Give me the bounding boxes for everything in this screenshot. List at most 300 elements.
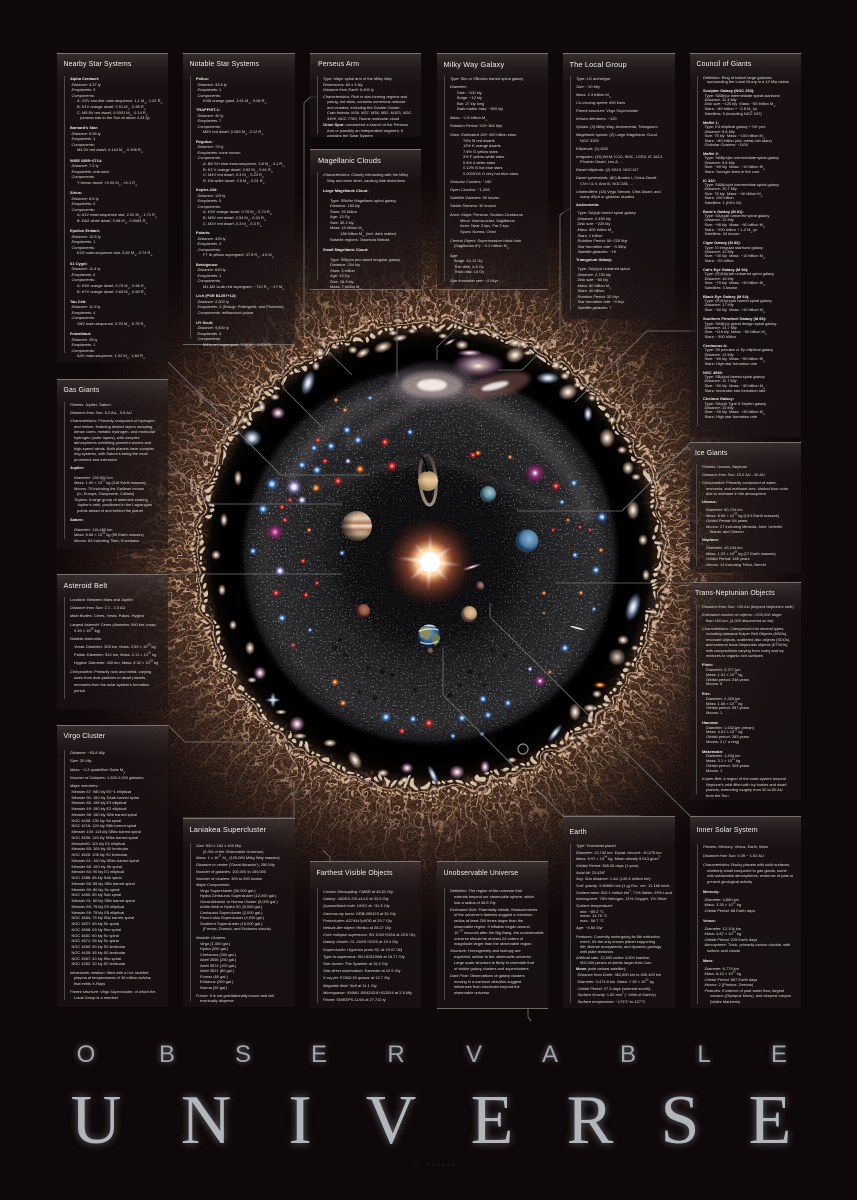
text block: Kepler-444: — [196, 187, 217, 192]
text block: Galaxy: JADES-GS-z14-0 at 33.9 Gly — [323, 896, 388, 901]
text block: Distance: 433 ly — [198, 236, 226, 241]
text block: C: M4V red dwarf, 0.3 M ☉, 0.24 R ☉ — [203, 172, 264, 179]
text block: Exoplanets: 3 — [198, 241, 221, 246]
text block: Parent structure: Virgo Supercluster — [576, 108, 639, 113]
text block: Age: — [450, 253, 458, 258]
text block: Type Ia supernova: SN UDS10Wil at 16.77 Gly — [323, 954, 405, 959]
arrow: Unobservable Universe — [528, 1009, 531, 1021]
text block: Bulge: 10-12 Gy — [454, 258, 482, 263]
text block: Axial tilt: 23.439° — [576, 870, 605, 875]
text block: Number of clusters: 300 to 500 known — [196, 876, 262, 881]
panel: Trans-Neptunian Objects — [690, 582, 801, 800]
text block: Orbital Period: 225 Earth days — [704, 937, 757, 942]
text block: Diameter: 116,460 km — [74, 527, 112, 532]
panel: Gas Giants: Moons: 83 including Titan, Enceladus — [74, 538, 139, 543]
text block: Supercluster: Hyperion proto-SC at 19.07 Gly — [323, 947, 402, 952]
text block: Stars: ~20 billion — [704, 258, 734, 263]
text block: Surface temperature: −173°C to 127°C — [578, 999, 645, 1004]
text block: Stars: 3 billion — [330, 268, 355, 273]
text block: Cigar Galaxy (M 82): — [703, 240, 741, 245]
text block: Sirius: — [70, 190, 82, 195]
text block: Gamma-ray burst: GRB-090423 at 30 Gly — [323, 911, 396, 916]
text block: period — [74, 688, 85, 693]
text block: Type: SAB(s)c intermediate spiral-starburst — [704, 93, 780, 98]
text block: Disk size: ~220 kly — [578, 221, 610, 226]
text block: Satellites: 5 (including NGC 247) — [704, 111, 762, 116]
text block: Diameter: 50,724 km — [706, 507, 743, 512]
heading: Ice Giants — [695, 450, 728, 457]
text block: 10−37 seconds after the Big Bang, the unobservable — [454, 929, 544, 935]
text block: Distance from Sun: 2.1 - 3.3 AU — [70, 605, 125, 610]
heading: Council of Giants — [696, 61, 752, 68]
text block: Distance: 16 Mly — [704, 276, 734, 281]
text block: Size: ~60 kly Mass: ~40 billion M ☉ — [704, 307, 765, 314]
text block: Diameter: 4,880 km — [704, 897, 739, 902]
text block: Exoplanets: 1 — [72, 342, 95, 347]
text block: A: G2V sun-like main sequence, 1.1 M ☉, 1.22 R ☉ — [77, 98, 163, 105]
text block: Moons: 5 — [706, 681, 722, 686]
text block: Mass: 1.66 × 1022 kg — [706, 700, 742, 706]
text block: than 100 km, (4,000 discovered so far) — [706, 618, 773, 622]
title line: Universe: UNIVERSE — [71, 1082, 791, 1159]
text block: Inner: Near 3 kpc, Far 3 kpc — [460, 223, 509, 228]
text block: K0III orange giant, 1.91 M ☉, 9.06 R ☉ — [203, 98, 267, 105]
text block: Distance: 119 ly — [198, 193, 225, 198]
text block: Components: — [72, 92, 95, 98]
text block: Exoplanets: 0 — [72, 201, 95, 206]
text block — [64, 750, 156, 1000]
text block: Age: 13 Gy — [330, 214, 350, 219]
star speckle field — [241, 368, 619, 744]
text block: Type: SAB(rs)cd intermediate spiral galaxy — [704, 182, 779, 187]
text block: Distance: 2,300 ly — [198, 299, 229, 304]
text block — [444, 888, 544, 1000]
panel: Earth — [563, 816, 675, 1008]
text block: Small Magellanic Cloud: — [323, 247, 368, 252]
text block: 12% K orange dwarfs — [463, 143, 501, 148]
text block: Distance: 9,500 ly — [198, 325, 229, 330]
arrow: Notable Star Systems — [240, 344, 323, 428]
text block: max: 56.7 °C — [580, 918, 604, 923]
text block: Components: — [72, 142, 95, 147]
text block: Centaurus (300 gal.) — [200, 952, 236, 957]
panel: Asteroid Belt — [57, 574, 168, 709]
spiral galaxy: Andromeda — [465, 367, 533, 403]
text block: Moons: 2 (+ a ring) — [706, 739, 739, 744]
text block: Distance: 11.4 Mly — [704, 97, 737, 102]
text block: NGC 4571: 55 kly Sc spiral — [72, 938, 119, 943]
text block: Type: LG archetype — [576, 76, 610, 81]
text block: Distance: 643 ly — [198, 267, 226, 272]
text block: C: M2V red dwarf, 0.3 M ☉, 0.3 R ☉ — [203, 221, 262, 228]
text block — [570, 843, 672, 1003]
text block: Core collapse supernova: SN 1000+0216 at 23.6 Gly — [323, 932, 415, 937]
text block: Distance: 11.7 Mly — [704, 378, 737, 383]
text block: Eridanus (200 gal.) — [200, 979, 233, 984]
text block: Distance: 2,450 kly — [578, 216, 611, 221]
text block: Magellanic spirals: (2) Large Magellanic Cloud, — [576, 132, 658, 137]
text block: Messier 100: 115 kly SBbc barred spiral — [72, 829, 141, 834]
text block: Diameter: 2,377 km — [706, 667, 740, 672]
text block: has a radius of 46.5 Gly — [454, 900, 496, 905]
text block: event, it's the only known planet supporting — [580, 939, 655, 944]
text block: Virgo (1,300 gal.) — [200, 941, 230, 946]
text block: Messier 84: 90 kly E1 elliptical — [72, 869, 124, 874]
text block: Stars: Estimated 100−400 billion stars — [450, 132, 516, 137]
text block — [697, 844, 793, 1004]
arrow: Farthest Visible Objects — [323, 850, 330, 861]
text block: C: M5.5V red dwarf, 0.0001 M ☉, 0.14 R ☉ — [77, 110, 148, 116]
title — [71, 1041, 791, 1167]
text block: Stars: moderate star formation rate — [704, 388, 766, 392]
arrow: Inner Solar System — [490, 603, 690, 816]
text block: Planets: Mercury, Venus, Earth, Mars — [703, 844, 768, 849]
text block: including classical Kuiper Belt Objects (KBOs), — [706, 631, 787, 636]
text block: life, diverse ecosystems, and dynamic geology — [580, 944, 661, 949]
panel: Magellanic Clouds: Mass: 7 billion M ☉ — [330, 284, 362, 291]
text block: Largest Asteroid: Ceres (diameter: 940 km, mass: — [70, 622, 157, 627]
stars and nebulae — [248, 395, 608, 740]
text block: NGC 4438: 130 kly Sa spiral — [72, 818, 121, 823]
text block: Estimated number of objects: >200,000 larger — [702, 612, 782, 617]
text block: Features: Currently undergoing its 6th extinction — [576, 934, 660, 939]
text block: UY Scuti: — [196, 320, 213, 325]
text block: NGC 4388: 85 kly SAb spiral — [72, 875, 122, 880]
text block: Sculptor Galaxy (NGC 253): — [703, 88, 754, 93]
text block: Type: I0 irregular starburst galaxy — [704, 245, 763, 250]
text block: Disk size: ~120 kly Mass: ~50 billion M ☉ — [704, 101, 776, 108]
heading: Notable Star Systems — [190, 61, 259, 68]
text block: Orbital period: 248 years — [706, 677, 749, 682]
text block: Components: — [72, 245, 95, 250]
text block: Size: ~70 kly Mass: ~30 billion M ☉ — [704, 280, 765, 287]
text block: Mass: 800 billion M ☉ — [578, 227, 614, 234]
text block: Jupiter's orbit, positioned in the Lagrangian — [77, 502, 152, 507]
text block: Thin disk: 4-8 Gy — [454, 264, 484, 269]
text block: A: A1V main-sequence star, 2.02 M ☉, 1.71 R ☉ — [77, 212, 157, 219]
text block: Venus: — [703, 918, 716, 923]
text block: (Fornax, Dorado, and Eridanus clouds) — [203, 926, 271, 931]
text block: Mass: ~1.2 quadrillion Solar M ☉ — [70, 766, 126, 773]
arrow: Nearby Star Systems — [168, 362, 370, 475]
text block: B: K7V orange dwarf, 0.63 M ☉, 0.60 R ☉ — [77, 288, 146, 295]
text block: Moons: 79 including the Galilean moons — [74, 486, 144, 491]
text block: Distance: 12 Mly — [704, 352, 734, 357]
text block: Diameter: 12,104 km — [704, 926, 741, 931]
text block: Surface area: 510.1 million km2, 71% Water, 29% Land — [576, 889, 672, 895]
text block: Distance: ~53.8 Mly — [70, 750, 105, 755]
text block: Hygiea: Diameter: 430 km, Mass: 8.32 × 1019 kg — [74, 659, 158, 665]
text block: 3499, NGC 7789, Taurus molecular cloud — [327, 116, 399, 121]
text block: Definition: Ring of twelve large galaxies — [703, 75, 772, 80]
text block: prominent and extensive — [74, 456, 117, 462]
text block: Regulus: — [196, 139, 213, 144]
text block: Messier 91: 80 kly SBb barred spiral — [72, 898, 135, 903]
text block: (Valles Marineris) — [710, 999, 740, 1004]
text block: Arm or possibly an independent segment, it — [327, 128, 403, 133]
text block: Distance from Sun: 0.39 − 1.52 AU — [703, 853, 764, 858]
text block: Messier 88: 100 kly Sb spiral — [72, 864, 122, 869]
text block: relatively small compared to gas giants, some — [707, 868, 787, 873]
text block: Type: S0 peculiar or Ep elliptical galaxy — [704, 347, 773, 352]
panel: Magellanic Clouds — [310, 149, 421, 290]
text block: Barnard's Star: — [70, 125, 98, 130]
text block — [190, 76, 285, 338]
text block: Diameter: 1,632 km (mean) — [706, 725, 754, 730]
text block: Hydra (200 gal.) — [200, 946, 228, 951]
planet: Venus — [461, 606, 477, 622]
arrow: Virgo Cluster — [168, 725, 290, 742]
text block — [570, 76, 663, 310]
text block: Exoplanets: 1 — [72, 239, 95, 244]
text block: Moons: 27 including Miranda, Ariel, Umbriel, — [706, 524, 783, 528]
heading: Nearby Star Systems — [64, 61, 131, 68]
text block: Crab Nebula, M36, M37, M38, M52, M103, NGC — [327, 110, 411, 115]
panel: Unobservable Universe — [437, 861, 548, 1009]
cosmic web texture — [75, 201, 784, 909]
heading: Asteroid Belt — [64, 581, 107, 590]
text block: B: DA2 white dwarf, 0.98 M ☉, 0.0084 R ☉ — [77, 218, 148, 225]
text block: Size: ~96 kly Mass: ~50 billion M ☉ — [704, 222, 765, 229]
text block: Components: millisecond pulsar — [198, 310, 253, 315]
text block: Way and each other, causing tidal distortions — [327, 178, 405, 182]
text block: Saturn: — [70, 517, 84, 522]
text block: Pluto: — [702, 662, 713, 667]
text block: mean: 14.76 °C — [580, 913, 607, 918]
text block: and helium, featuring distinct layers including — [74, 424, 152, 428]
text block: Type: SB(s)cd barred spiral galaxy — [704, 374, 765, 379]
text block: with compositions varying from rocky and icy — [706, 648, 784, 652]
text block: Southern Pinwheel Galaxy (M 83): — [703, 316, 766, 321]
text block: observable universe. — [454, 990, 490, 995]
panel: Notable Star Systems: Components: — [198, 336, 221, 341]
text block: Magnetic field: 9io9 at 11.1 Gly — [323, 983, 377, 988]
text block: Surface temperature: — [576, 903, 613, 908]
text block: Orbital period: 283 years — [706, 734, 749, 739]
text block: universe should be at least 24 orders of — [454, 936, 523, 941]
text block: Exoplanets: 3 (Draugr, Poltergeist, and Phobetor) — [198, 304, 284, 309]
text block: mixtures to organic-rich surfaces — [706, 653, 763, 658]
text block: Diameter: 6,779 km — [704, 966, 739, 971]
text: M4Ia red supergiant, 7-10 M ☉, 1,700 R ☉ — [203, 342, 273, 349]
planet: Jupiter — [342, 511, 372, 541]
text block: Messier 87: 980 kly E0~1 elliptical — [72, 789, 131, 794]
text block: Stars: 20 billion — [330, 209, 357, 214]
text block: Messier 98: 150 kly SBb barred spiral — [72, 812, 137, 817]
text block: 0.12% B hot blue stars — [463, 165, 503, 170]
text block: Microquasar: XMMU J004243.6+412519 at 2.5 Mly — [323, 990, 412, 995]
text block: Characteristics: Primarily composed of hydrogen — [70, 418, 155, 423]
text block: Distance: 204 kly — [330, 262, 360, 267]
text block: Components: — [198, 247, 221, 252]
text block: Diameter: 49,244 km — [706, 545, 743, 550]
text block: Major members: — [70, 783, 98, 788]
text block: M1-M2 Ia-ab red supergiant, ~710 R ☉, ~17 M ☉ — [203, 284, 285, 291]
text block: Mass: ~1.5 trillion M ☉ — [450, 115, 488, 122]
text block: NGC 4945: — [703, 370, 723, 375]
text block: Mars: — [703, 958, 714, 963]
text block: F7 Ib yellow supergiant, 37.5 R ☉, 4.5 M ☉ — [203, 252, 274, 259]
heading: Laniakea Supercluster — [190, 825, 266, 834]
text block: Large scale structure is likely to resemble that — [454, 960, 534, 965]
text block: Bulge: ~12 kly — [457, 95, 482, 100]
text block: Maffei 2: — [703, 151, 719, 156]
text block: Distance: 11.4 ly — [72, 266, 100, 271]
text block: Components: — [72, 207, 95, 212]
planet: Mars — [356, 604, 370, 618]
spiral galaxy: Milky Way — [390, 363, 474, 407]
text block: Ellipticals: (1) M32 — [576, 146, 608, 151]
text block: Unidentified: (18) Virgo Stream, Cifra Dwarf, and — [576, 189, 661, 194]
arrow: Perseus Arm — [304, 97, 352, 375]
arrow: Gas Giants — [168, 462, 342, 504]
text block: Satellite galaxies: 7 — [578, 305, 611, 310]
text block: Distance: 9.8 Mly — [704, 128, 735, 134]
text block — [444, 76, 523, 282]
text block: Notable regions: Tarantula Nebula — [330, 237, 389, 242]
universe illustration — [68, 96, 792, 1166]
text block: Distance from Sun: 5.2 AU - 9.6 AU — [70, 410, 132, 415]
text block: Size: 75 kly Mass: ~40 billion M ☉ — [704, 191, 763, 197]
text block: Antlia Wall or Hydra SC (5,000 gal.) — [200, 904, 262, 909]
text block: Mass: 4.01 × 1021 kg — [706, 729, 742, 734]
text block: Star formation rate: ~0.35/yr — [578, 244, 627, 249]
text block: Uranus: — [702, 499, 717, 504]
text block: Mass: 10 billion M ☉ — [330, 225, 364, 232]
text block: Messier 99: 80 kly Sc spiral — [72, 887, 119, 892]
text block: min: −89.2 °C — [580, 909, 604, 914]
text block: Open Clusters: ~1,200 — [450, 187, 490, 192]
text block: Mass: 1 x 1017 M ☉ (100,000 Milky Way masses) — [196, 855, 280, 862]
text block: Exoplanets: 1 — [72, 136, 95, 141]
text block: Mass: 50 billion M ☉ — [578, 283, 611, 289]
spiral galaxy: Triangulum — [451, 352, 505, 378]
arrow: Milky Way — [437, 290, 483, 360]
text block: Notable Asteroids: — [70, 636, 102, 641]
text block: of visible galaxy clusters and superclusters — [454, 966, 529, 971]
planet: Mercury — [474, 581, 484, 591]
text block: Distance: 8.6 ly — [72, 196, 98, 201]
panel: Laniakea Supercluster — [183, 818, 295, 1007]
text block: Diameter: 139,820 km — [74, 475, 113, 480]
nebula arcs — [290, 389, 590, 520]
text block: surrounding the Local Group in a 12 Mly radius — [707, 79, 789, 84]
text block: B: M3V red dwarf, 0.34 M ☉, 0.34 R ☉ — [203, 215, 266, 222]
text block: Spurs: Norma, Orion — [460, 229, 496, 234]
text block: Type: SA(s)b barred spiral galaxy — [578, 210, 636, 215]
text block: Stars: High star formation rate — [704, 361, 757, 366]
text block: Distance: 163 kly — [330, 203, 360, 208]
panel: Nearby Star Systems — [57, 53, 168, 362]
text block: Size: 520 x 160 x 100 Mly — [196, 843, 241, 848]
heading: Milky Way Galaxy — [444, 60, 504, 69]
text block: Exoplanets: none known — [198, 150, 240, 155]
arrow: Earth — [443, 648, 640, 816]
text block: Satellites: 34 known — [704, 231, 740, 236]
text block: Large Magellanic Cloud: — [323, 188, 369, 193]
text block: (Io, Europa, Ganymede, Callisto) — [77, 491, 134, 496]
text block: Abell 3574 (100 gal.) — [200, 963, 236, 968]
text block: Messier 86: 155 kly E3 elliptical — [72, 800, 126, 805]
text block: planets, extending roughly from 30 to 50 AU — [706, 787, 783, 792]
text block: Distance: 79 ly — [198, 144, 223, 149]
text block: Components: — [198, 92, 221, 98]
text block: Betelgeuse: — [196, 262, 218, 267]
text block: NGC 4536: 115 kly SBbc barred spiral — [72, 835, 138, 840]
text block: A: K5V orange dwarf, 0.70 M ☉, 0.66 R ☉ — [77, 283, 146, 290]
text block: Satellites: 3 known — [704, 285, 737, 290]
text block: Disk size: ~60 kly — [578, 277, 608, 282]
text block: Distance: 4.37 ly — [72, 82, 101, 86]
text block: A: B8 IVn blue main-sequence, 3.8 M ☉, 4.1 R ☉ — [203, 161, 285, 168]
text block: Type: (R)SA(rs)ab barred spiral galaxy — [704, 298, 772, 303]
text block: eventually disperse — [200, 998, 234, 1003]
text block: Type: Terrestrial planet — [576, 843, 616, 848]
leader lines — [168, 97, 696, 1021]
text block: many dSph or globular clusters — [580, 194, 634, 199]
planet: Neptune — [516, 530, 538, 552]
text block: Type: SA(s)b Type II Seyfert galaxy — [704, 401, 766, 406]
text block: NGC 4527: 69 kly Sb spiral — [72, 921, 119, 926]
text block: Planet: SWEEPS-11/04 at 27,710 ly — [323, 997, 386, 1002]
text block: Location: Between Mars and Jupiter — [70, 597, 133, 602]
text block: (0.4% of the Observable Universe) — [203, 848, 263, 854]
text block: Galaxy cluster: CL J1001+0220 at 19.4 Gly — [323, 939, 398, 944]
text block: Type: E3 elliptical galaxy + S0−pec — [704, 124, 766, 129]
text block: Size: ~60 kly Mass: ~10 billion M ☉ — [704, 164, 765, 171]
text block: Future: It is not gravitationally bound and will — [196, 993, 274, 998]
text block: IC 342: — [703, 178, 716, 183]
panel: Perseus Arm — [310, 53, 421, 137]
galaxy filament chain — [192, 318, 668, 794]
text block: Messier 58: 85 kly SBb barred spiral — [72, 881, 135, 886]
text block: Stars: Younger stars in the core — [704, 169, 759, 174]
text block: Orbital Period: 84 years — [706, 518, 747, 523]
text block: Spirals: (3) Milky Way, Andromeda, Triangulum — [576, 124, 658, 129]
text block: NGC 4450: 80 kly Sab spiral — [72, 892, 121, 897]
text block: Y brown dwarf, <0.03 M ☉, <0.1 R ☉ — [77, 180, 137, 187]
panel: Inner Solar System — [690, 816, 801, 1008]
text block: Exoplanets: unknown — [72, 169, 109, 174]
text block — [697, 76, 789, 426]
text block: Moons: 2 (Phobos, Deimos) — [704, 982, 753, 987]
text block: Distance: 10.7 Mly — [704, 186, 737, 191]
text block: Dark Flow: Observations of galaxy clusters — [450, 973, 525, 978]
heading: Unobservable Universe — [444, 870, 518, 877]
text block: NGC 4568: 63 kly Sbc spiral — [72, 927, 121, 932]
text block — [64, 597, 158, 699]
text block: Stars: ~200 billion + 1-2 M ☉/yr — [704, 227, 757, 233]
text block: Orbital period: 305 years — [706, 763, 749, 768]
text block: Bar: 27 kly long — [457, 100, 484, 106]
text block: sizes from dust particles to dwarf planets, — [74, 675, 146, 680]
text block: Satellite Galaxies: 59 known — [450, 195, 499, 200]
sun — [384, 516, 476, 608]
text block: Triangulum Galaxy: — [576, 257, 613, 262]
text block: Distance to center ('Great Attractor'): 250 Mly — [196, 862, 275, 867]
text block: NGC 4262: 30 kly S0 lenticular — [72, 961, 125, 966]
text block: Centaurus A: — [703, 343, 728, 348]
text block: ring systems, with Saturn's being the most — [74, 451, 148, 456]
text block: NGC 4567: 40 kly Sbc spiral — [72, 956, 121, 961]
text block: volcano (Olympus Mons), and deepest canyon — [710, 993, 791, 998]
text block: Components: — [198, 278, 221, 283]
text block: Exoplanets: 0 — [72, 272, 95, 277]
text block: dense cores, metallic hydrogen, and molecular — [74, 429, 155, 434]
text block: Distance from Earth: 362,600 km to 405,400 km — [578, 972, 661, 977]
text block: Pallas: Diameter: 512 km, Mass: 2.11 × 1020 kg — [74, 651, 156, 657]
text block: Stars: ~80 billion + ~2.5 M ☉/yr — [704, 106, 757, 113]
